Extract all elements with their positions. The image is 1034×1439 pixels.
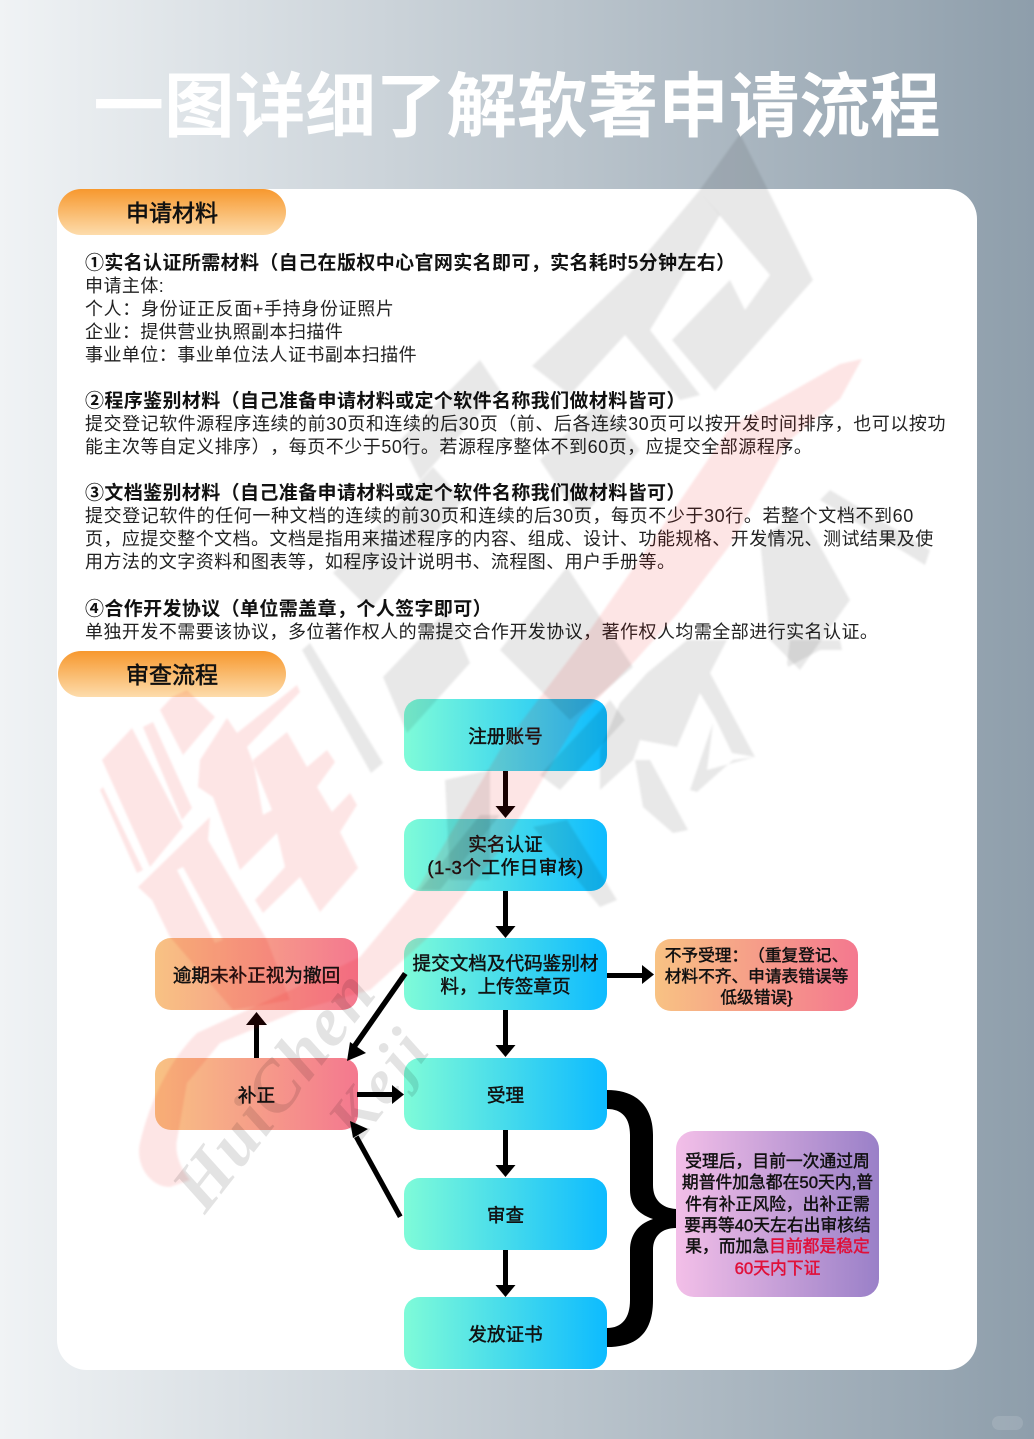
flow step: correction: [155, 1058, 358, 1130]
callout: timing note: 件有补正风险，出补正需: [685, 1195, 870, 1214]
callout: timing note: 要再等40天左右出审核结: [684, 1216, 871, 1235]
text block: program identification materials: 能主次等自定义排序），每页不少于50行。若源程序整体不到60页，应提交全部源程序。: [85, 437, 812, 457]
flow step: real-name verification: 实名认证: [468, 834, 543, 855]
flow step: correction: 补正: [238, 1084, 275, 1106]
flow step: submit documents and code: [404, 938, 607, 1010]
text block: program identification materials: ②程序鉴别材料（自己准备申请材料或定个软件名称我们做材料皆可）: [85, 391, 686, 412]
text block: cooperative development agreement: ④合作开发协议（单位需盖章，个人签字即可）: [85, 599, 492, 620]
flow step: not accepted: [655, 939, 858, 1011]
text block: real-name materials: 申请主体:: [85, 276, 164, 296]
panel: white card: [57, 189, 977, 1370]
text block: cooperative development agreement: 单独开发不需要该协议，多位著作权人的需提交合作开发协议，著作权人均需全部进行实名认证。: [85, 622, 878, 642]
text block: real-name materials: [85, 252, 736, 365]
callout: timing note: 期普件加急都在50天内,普: [682, 1173, 873, 1192]
heading: review process: [58, 651, 286, 697]
flow step: issue certificate: 发放证书: [468, 1324, 543, 1344]
text block: document identification materials: 提交登记软件的任何一种文档的连续的前30页和连续的后30页，每页不少于30行。若整个文档不到60: [85, 506, 914, 526]
text block: real-name materials: ①实名认证所需材料（自己在版权中心官网实名即可，实名耗时5分钟左右）: [85, 253, 736, 274]
flow step: register account: 注册账号: [468, 726, 543, 746]
callout: timing note: [676, 1131, 879, 1297]
flow step: real-name verification: [404, 819, 607, 891]
flow step: review: [404, 1178, 607, 1250]
text block: document identification materials: 页，应提交整个文档。文档是指用来描述程序的内容、组成、设计、功能规格、开发情况、测试结果及使: [85, 529, 934, 549]
text block: real-name materials: 事业单位：事业单位法人证书副本扫描件: [85, 345, 417, 365]
watermark latin text: HuiChen: [156, 955, 392, 1226]
flow step: not accepted: 材料不齐、申请表错误等: [665, 966, 848, 986]
title: 一图详细了解软著申请流程: [93, 67, 941, 146]
flow step: submit documents and code: 提交文档及代码鉴别材: [413, 953, 598, 974]
flow step: issue certificate: [404, 1297, 607, 1369]
text block: real-name materials: 企业：提供营业执照副本扫描件: [85, 322, 343, 342]
text block: document identification materials: 用方法的文字资料和图表等，如程序设计说明书、流程图、用户手册等。: [85, 552, 675, 572]
flow step: overdue means withdrawn: 逾期未补正视为撤回: [173, 964, 340, 986]
callout: timing note: 受理后，目前一次通过周: [685, 1152, 870, 1171]
flow step: overdue means withdrawn: [155, 938, 358, 1010]
watermark latin text second line: Keji: [312, 1013, 445, 1154]
text block: document identification materials: ③文档鉴别材料（自己准备申请材料或定个软件名称我们做材料皆可）: [85, 483, 686, 504]
flow step: accepted: [404, 1058, 607, 1130]
text block: program identification materials: [85, 390, 946, 457]
flow step: register account: [404, 699, 607, 771]
text block: cooperative development agreement: [85, 598, 878, 642]
flow step: not accepted: 不予受理：（重复登记、: [665, 946, 848, 964]
heading: review process: 审查流程: [126, 662, 218, 688]
text block: program identification materials: 提交登记软件源程序连续的前30页和连续的后30页（前、后各连续30页可以按开发时间排序，也可以按功: [85, 414, 946, 434]
callout: timing note: 果，而加急目前都是稳定: [685, 1237, 870, 1256]
flow step: accepted: 受理: [487, 1084, 524, 1106]
flow step: review: 审查: [487, 1204, 524, 1226]
heading: application materials: [58, 189, 286, 235]
bracket: [607, 1090, 676, 1347]
text block: real-name materials: 个人：身份证正反面+手持身份证照片: [85, 299, 395, 319]
text block: document identification materials: [85, 482, 934, 572]
icon: corner logo: [992, 1416, 1023, 1430]
flow step: real-name verification: (1-3个工作日审核): [427, 857, 584, 878]
flow step: not accepted: 低级错误}: [720, 988, 793, 1006]
callout: timing note: 60天内下证: [735, 1259, 820, 1278]
heading: application materials: 申请材料: [126, 200, 218, 226]
flow step: submit documents and code: 料，上传签章页: [440, 976, 571, 997]
